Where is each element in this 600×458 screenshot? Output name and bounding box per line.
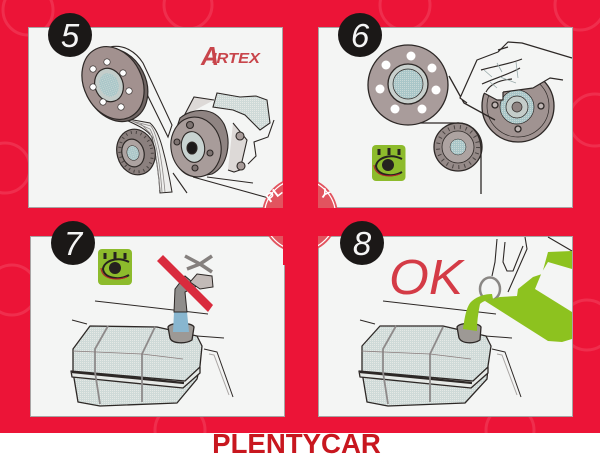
step badges — [48, 13, 384, 265]
logo: Airtex — [200, 41, 261, 71]
badge: 6: 6 — [351, 17, 370, 54]
icon: eye inspection — [372, 145, 406, 181]
icon: water pump — [166, 93, 283, 202]
logo: Airtex: IRTEX — [212, 50, 261, 67]
badge: 8: 8 — [353, 225, 372, 262]
icon: hand — [460, 42, 572, 103]
panel: step 8 — [318, 236, 572, 416]
panel: step 6 — [318, 28, 572, 208]
badge: 6 — [338, 13, 382, 57]
badge: 8 — [340, 221, 384, 265]
badge: 5: 5 — [61, 17, 80, 54]
icon: upper pulley — [70, 36, 160, 132]
icon: eye inspection — [98, 249, 132, 285]
icon: prohibition bar — [157, 255, 213, 312]
center stamp — [250, 165, 350, 265]
icon: tensioner pulley — [112, 125, 160, 179]
icon: water stream — [173, 312, 189, 332]
panel: step 7 — [30, 236, 284, 416]
icon: coolant tank — [359, 301, 521, 406]
badge: 7 — [51, 221, 95, 265]
center stamp: PL — [263, 183, 285, 205]
icon: tap — [174, 256, 213, 312]
icon: coolant tank — [71, 301, 233, 406]
icon: large pulley — [368, 45, 448, 125]
icon: small pulley — [434, 123, 482, 171]
badge: 7: 7 — [64, 225, 84, 262]
icon: belt — [420, 76, 495, 194]
icon: tensioner pulley — [482, 70, 554, 142]
logo: Airtex: A — [200, 41, 219, 71]
panel: step 5 — [28, 28, 283, 208]
icon: coolant stream and jug — [463, 237, 572, 342]
badge: 5 — [48, 13, 92, 57]
text: OK: OK — [389, 251, 465, 305]
icon: belt — [110, 46, 172, 193]
center stamp: Y — [317, 185, 333, 203]
